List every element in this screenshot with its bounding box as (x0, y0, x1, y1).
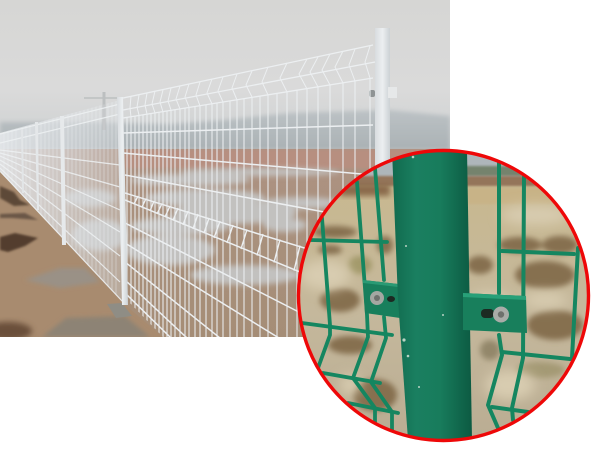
puddles (66, 165, 339, 288)
main white post (117, 97, 128, 305)
green mesh wires, right panel (488, 163, 578, 428)
far white post 2 (60, 116, 66, 245)
right post, far end (375, 28, 390, 178)
detail sky (364, 154, 522, 178)
right clamp bracket (463, 293, 527, 333)
far white post 3 (35, 122, 39, 210)
green pole (392, 150, 472, 440)
site ground (0, 149, 450, 339)
red ring (298, 150, 588, 440)
crane in the distance (84, 92, 118, 130)
left clamp bracket (363, 280, 400, 318)
far fence haze (0, 114, 122, 300)
right fence panel top chevrons (123, 45, 375, 118)
horizontal wires (123, 125, 373, 351)
pole paint chips (402, 156, 444, 388)
muddy foreground (0, 172, 163, 337)
green mesh wires, left panel (302, 168, 398, 430)
circle contents (295, 145, 595, 448)
lower V-bend ticks (134, 196, 300, 271)
photo: white fence on a foggy site (0, 0, 450, 351)
circular detail (295, 145, 595, 448)
shrubs (313, 226, 583, 411)
sky (0, 0, 450, 150)
field background (300, 185, 587, 436)
pale sand mounds (300, 205, 570, 400)
left fence wires (0, 100, 125, 305)
distant hills (0, 110, 450, 150)
reddish far band (126, 151, 414, 168)
post clamps (369, 87, 397, 98)
vertical wires (127, 70, 370, 340)
mud patches and wet ground (0, 186, 150, 340)
tree line and red scrub band (340, 166, 560, 204)
right fence panel (123, 70, 373, 351)
far white post 4 (22, 130, 24, 193)
